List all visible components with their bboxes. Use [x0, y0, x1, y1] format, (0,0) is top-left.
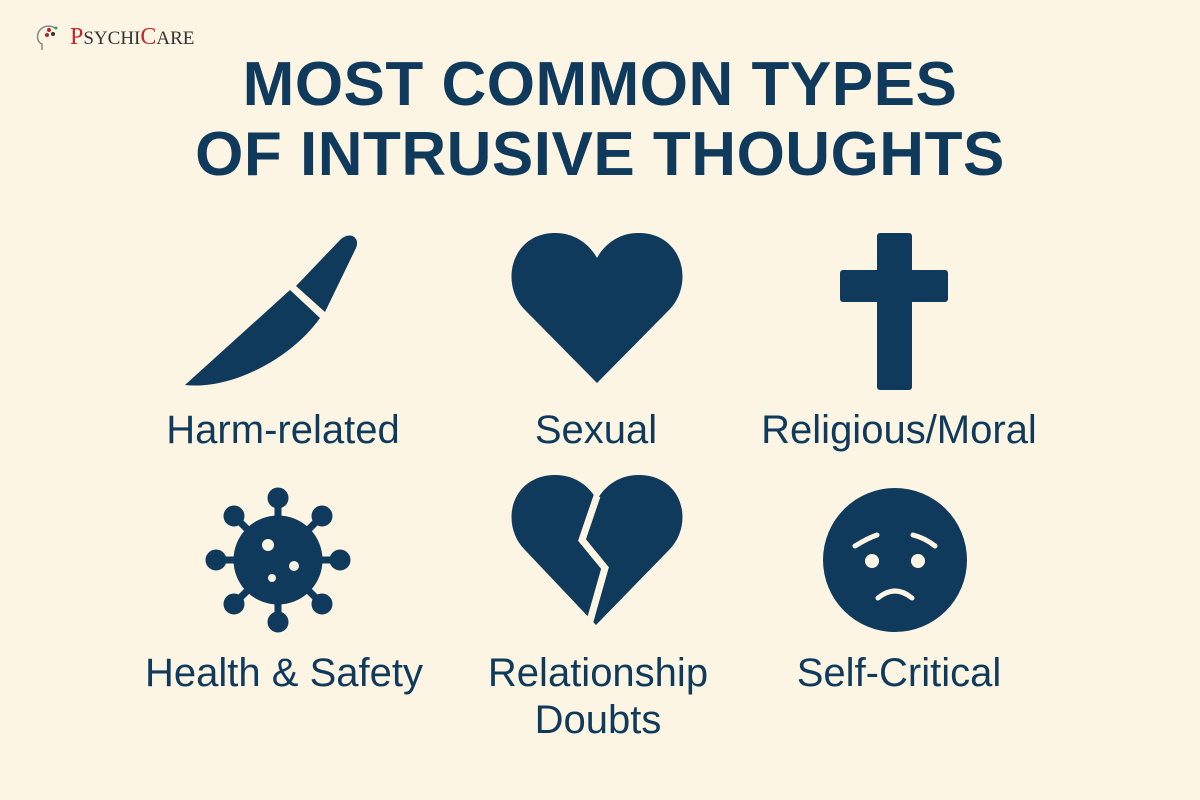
- label: sexual: Sexual: [535, 408, 657, 452]
- title: MOST COMMON TYPES: [243, 50, 957, 119]
- icon: broken heart: [512, 475, 682, 628]
- icon: heart: [512, 233, 682, 383]
- icon: virus: [206, 488, 350, 632]
- label: religious: Religious/Moral: [761, 408, 1037, 452]
- label: relationship: Doubts: [535, 698, 661, 742]
- label: health: Health & Safety: [145, 651, 423, 695]
- title: OF INTRUSIVE THOUGHTS: [195, 120, 1005, 189]
- label: relationship: Relationship: [488, 651, 708, 695]
- icon: cross: [840, 233, 948, 390]
- label: harm: Harm-related: [166, 408, 400, 452]
- icon: knife: [185, 235, 357, 386]
- title: [195, 50, 1005, 189]
- label: relationship: [488, 651, 708, 742]
- icon: worried face: [823, 488, 967, 632]
- label: self-critical: Self-Critical: [797, 651, 1001, 695]
- logo: PSYCHICARE: [70, 24, 194, 50]
